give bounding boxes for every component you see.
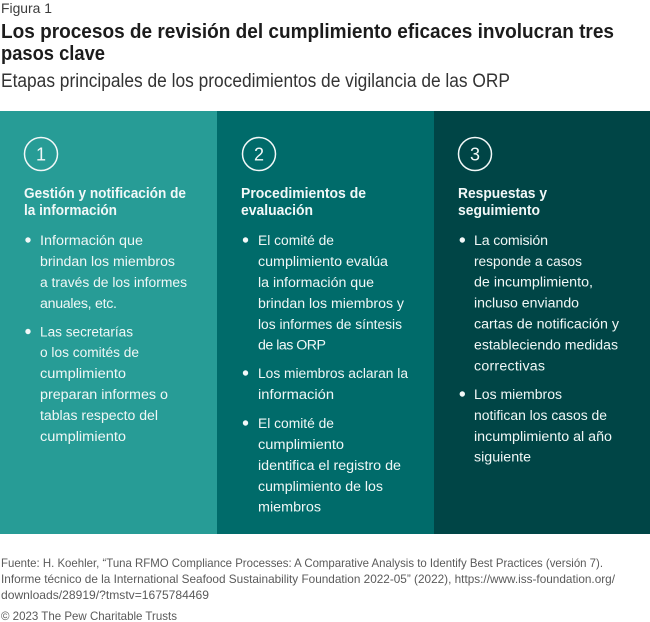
bullet: members notify: incumplimiento al año [474,429,612,445]
bullet: committee identifies: El comité de [258,416,334,432]
heading: step 1: la información [24,203,117,219]
bullet: commission responds: estableciendo medidas [474,338,618,354]
heading: step 2: evaluación [241,203,313,219]
bullet: annual reports: anuales, etc. [40,296,117,312]
heading: step 2: Procedimientos de [241,186,366,202]
bullet: committee evaluates: la información que [258,275,374,291]
heading: step 1: Gestión y notificación de [24,186,186,202]
bullet: members clarify [243,366,408,403]
bullet: commission responds: La comisión [474,233,548,249]
bullet: committee identifies: cumplimiento de los [258,479,383,495]
heading: step 3: Respuestas y [458,186,547,202]
bullet: committee evaluates: cumplimiento evalúa [258,254,388,270]
bullet: committee evaluates: brindan los miembros y [258,296,405,312]
bullet: committee evaluates: de las ORP [258,338,326,354]
icon: number 3 [458,138,492,170]
source note [1,556,616,602]
bullet: annual reports: a través de los informes [40,275,187,291]
bullet: annual reports: brindan los miembros [40,254,175,270]
bullet: members clarify: información [258,387,334,403]
icon: number 2: 2 [254,144,264,164]
panel: step 3 [434,111,650,534]
bullet: committee identifies: cumplimiento [258,437,344,453]
heading: step 3 [458,186,547,219]
icon: number 1: 1 [36,144,46,164]
source note: downloads/28919/?tmstv=1675784469 [1,588,209,602]
icon: number 3: 3 [470,144,480,164]
bullet: committee evaluates: El comité de [258,233,334,249]
title: Los procesos de revisión del cumplimiento eficaces involucran tres [1,21,614,43]
bullet: committee evaluates: los informes de síntesis [258,317,402,333]
bullet: members notify: Los miembros [474,387,562,403]
bullet: secretariats: cumplimiento [40,366,126,382]
bullet: commission responds: correctivas [474,358,545,374]
bullet: secretariats: preparan informes o [40,387,168,403]
bullet: members notify: notifican los casos de [474,408,607,424]
bullet: commission responds: responde a casos [474,254,582,270]
title [1,21,614,65]
heading: step 1 [24,186,186,219]
source note: Informe técnico de la International Seafood Sustainability Foundation 2022-05” (2022), https://www.iss-foundation.org/ [1,572,616,586]
bullet: committee identifies: miembros [258,500,321,516]
subtitle: Etapas principales de los procedimientos de vigilancia de las ORP [1,71,510,92]
bullet: committee evaluates [243,233,405,354]
bullet: annual reports: Información que [40,233,143,249]
bullet: annual reports [25,233,187,312]
title: pasos clave [1,43,105,65]
bullet: members notify: siguiente [474,450,531,466]
panel: step 2 [217,111,434,534]
heading: step 2 [241,186,366,219]
bullet: commission responds: de incumplimiento, [474,274,593,290]
bullet: secretariats: cumplimiento [40,429,126,445]
heading: step 3: seguimiento [458,203,540,219]
source note: Fuente: H. Koehler, “Tuna RFMO Compliance Processes: A Comparative Analysis to Identify Best Practices (versión 7). [1,556,603,570]
icon: number 2 [242,138,276,170]
bullet: commission responds [460,233,620,374]
bullet: committee identifies [243,416,401,516]
bullet: secretariats: Las secretarías [40,324,133,340]
icon: number 1 [24,138,58,170]
bullet: secretariats: tablas respecto del [40,408,158,424]
bullet: secretariats: o los comités de [40,345,139,361]
bullet: commission responds: cartas de notificación y [474,316,620,332]
bullet: secretariats [25,324,168,445]
bullet: members notify [460,387,612,466]
panel: step 1 [0,111,217,534]
figure label: Figura 1 [1,0,52,16]
bullet: members clarify: Los miembros aclaran la [258,366,408,382]
bullet: committee identifies: identifica el registro de [258,458,401,474]
bullet: commission responds: incluso enviando [474,296,579,312]
